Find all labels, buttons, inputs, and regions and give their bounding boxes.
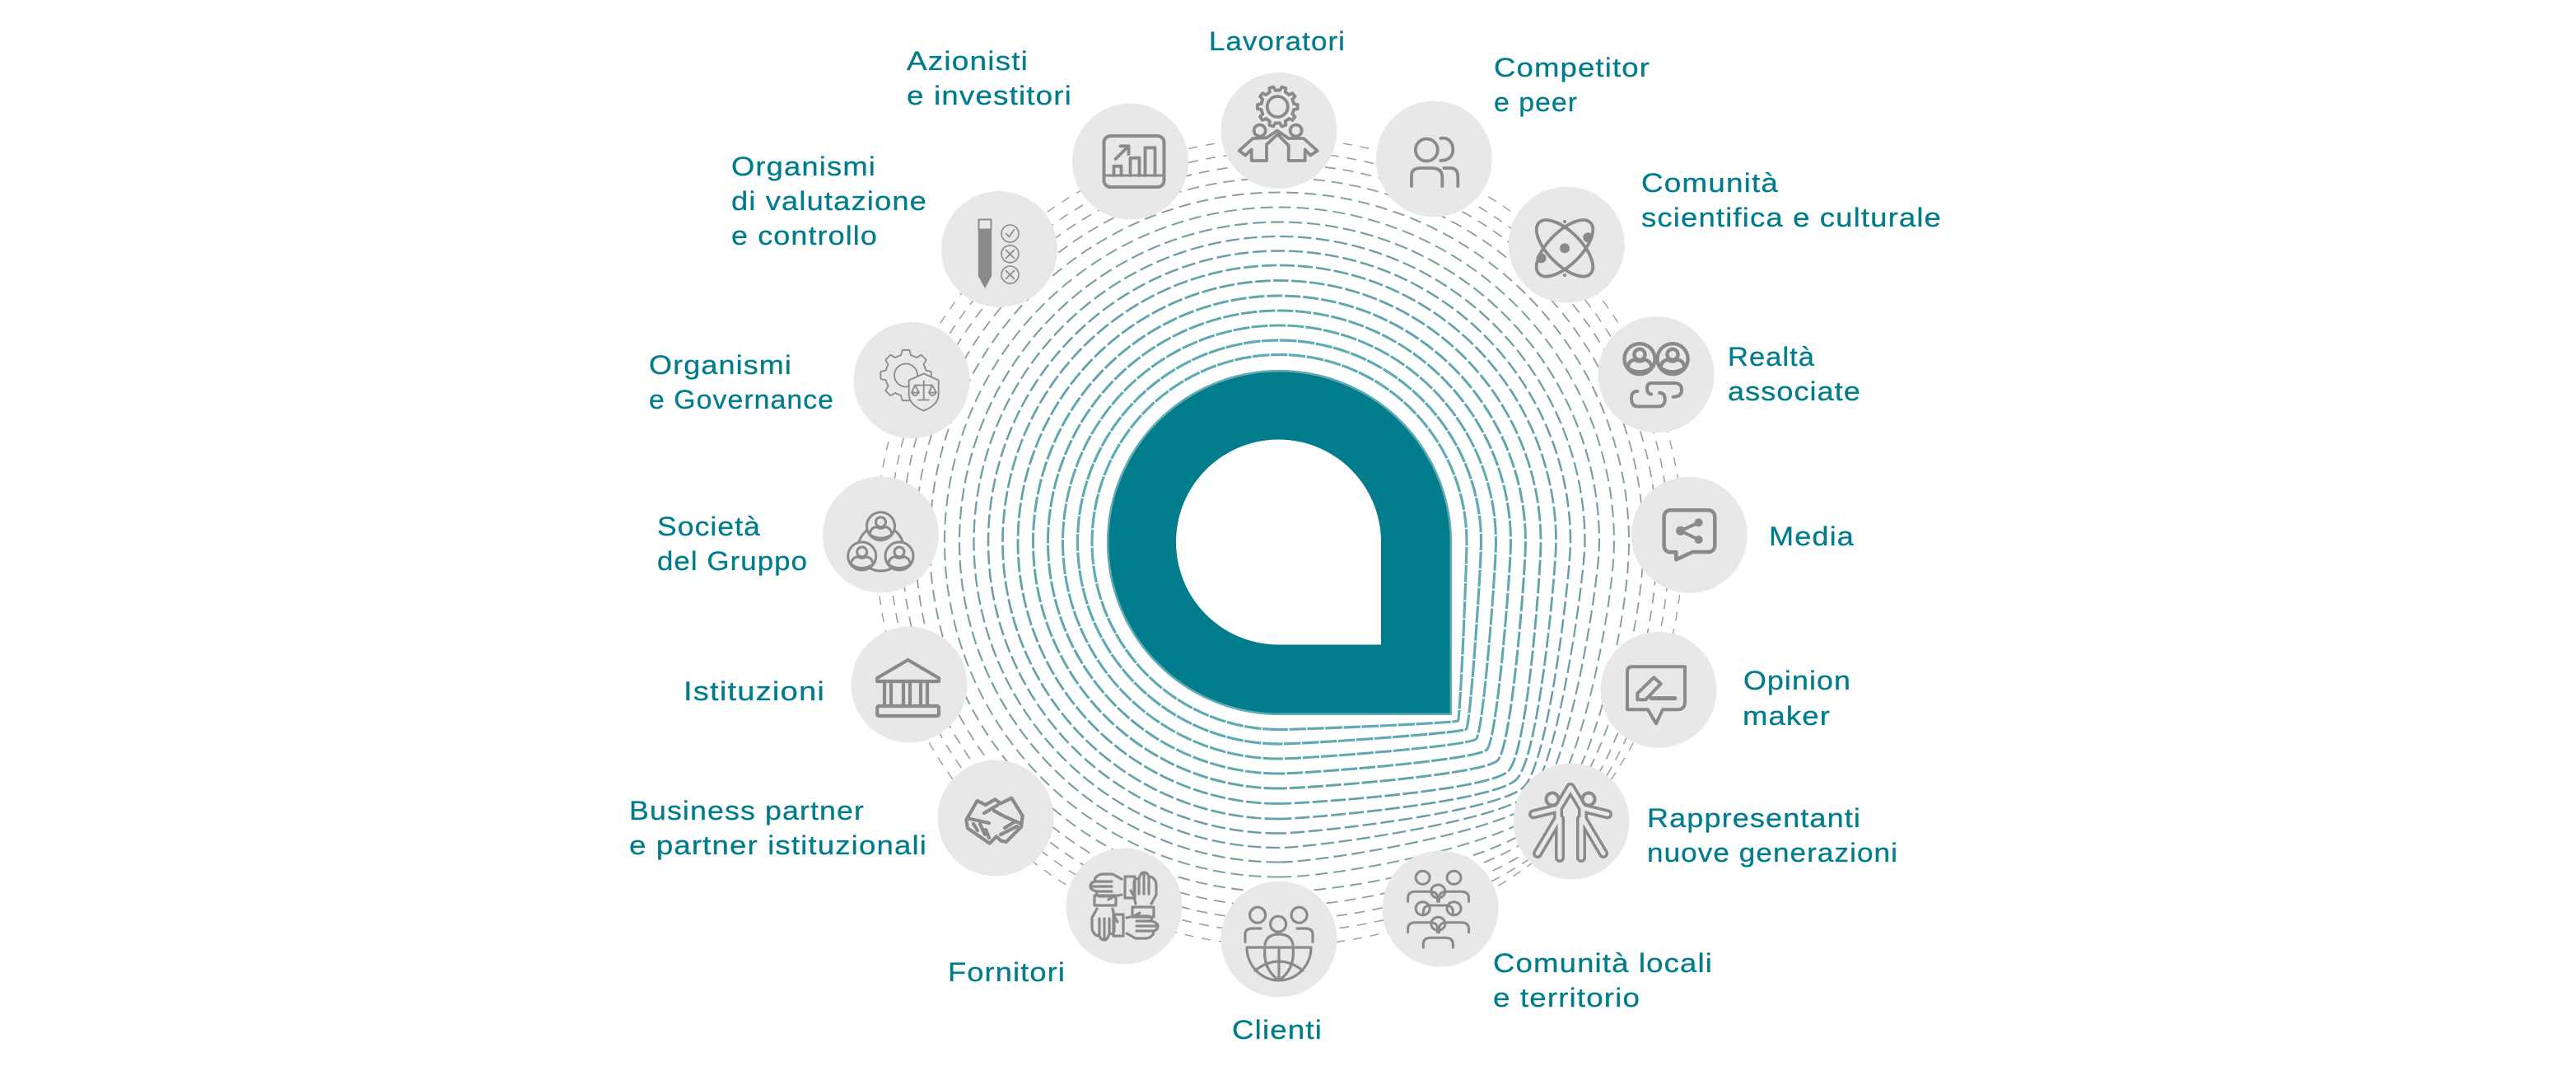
label: Rappresentanti nuove generazioni: Rappresentanti: [1647, 803, 1861, 833]
label: Organismi e Governance: Organismi: [649, 350, 792, 380]
label: Organismi di valutazione e controllo: [731, 152, 927, 250]
logo outline: [1108, 371, 1451, 714]
stakeholder: Comunità locali e territorio: [1382, 850, 1713, 1013]
stakeholder: Business partner e partner istituzionali: [629, 760, 1054, 877]
stakeholder: Lavoratori: [1209, 26, 1346, 189]
icon: gear above two people: [1220, 72, 1337, 189]
label: Comunità locali e territorio: e territorio: [1493, 983, 1640, 1013]
icon: people above a globe: [1220, 882, 1337, 997]
icon: two people: [1376, 101, 1492, 217]
stakeholder: Organismi di valutazione e controllo: [731, 152, 1057, 307]
icon: three connected avatars: [823, 476, 939, 593]
label: Realtà associate: associate: [1728, 376, 1861, 406]
central logo: teal drop with white counter: [1107, 370, 1452, 715]
label: Comunità locali e territorio: Comunità locali: [1493, 948, 1713, 978]
icon: handshake: [937, 760, 1054, 877]
label: Comunità scientifica e culturale: Comunità: [1641, 168, 1779, 198]
label: Azionisti e investitori: Azionisti: [907, 46, 1029, 76]
label: Competitor e peer: e peer: [1494, 87, 1578, 117]
stakeholder: Realtà associate: [1598, 316, 1861, 433]
icon: four interlocking hands: [1066, 849, 1183, 964]
icon: pencil with checklist: [941, 191, 1057, 307]
stakeholder: Fornitori: [948, 849, 1183, 987]
stakeholder: Istituzioni: [684, 626, 967, 743]
label: Azionisti e investitori: [907, 46, 1072, 110]
icon: gear with shield and scales: [853, 322, 970, 438]
stakeholder: Opinion maker: [1601, 632, 1851, 748]
stakeholder: Azionisti e investitori: [907, 46, 1188, 219]
label: Business partner e partner istituzionali: e partner istituzionali: [629, 830, 927, 860]
label: Organismi di valutazione e controllo: di valutazione: [731, 186, 927, 216]
icon: crowd of people: [1382, 850, 1499, 967]
stakeholder: Rappresentanti nuove generazioni: [1514, 763, 1898, 880]
label: Rappresentanti nuove generazioni: nuove generazioni: [1647, 838, 1898, 868]
icon: atom: [1509, 186, 1625, 303]
label: Opinion maker: Opinion: [1743, 666, 1851, 695]
label: Business partner e partner istituzionali: Business partner: [629, 796, 865, 825]
label: Azionisti e investitori: e investitori: [907, 81, 1072, 110]
icon: speech bubble with pencil: [1601, 632, 1716, 748]
label: Istituzioni: Istituzioni: [684, 676, 825, 706]
label: Organismi e Governance: e Governance: [649, 385, 834, 414]
label: Competitor e peer: Competitor: [1494, 53, 1650, 82]
stakeholder: Comunità scientifica e culturale: [1509, 168, 1942, 303]
label: Rappresentanti nuove generazioni: [1647, 803, 1898, 868]
label: Realtà associate: [1728, 342, 1861, 406]
label: Organismi e Governance: [649, 350, 834, 414]
icon: speech bubble with share symbol: [1631, 477, 1748, 593]
label: Opinion maker: maker: [1743, 701, 1831, 731]
icon: two avatars and chain link: [1598, 316, 1715, 433]
label: Comunità scientifica e culturale: [1641, 168, 1942, 232]
stakeholder: Organismi e Governance: [649, 322, 970, 438]
stakeholder: Media: [1631, 477, 1855, 593]
concentric dashed rings around the logo: [876, 138, 1683, 946]
label: Società del Gruppo: Società: [657, 512, 761, 541]
stakeholder: Società del Gruppo: [657, 476, 939, 593]
label: Organismi di valutazione e controllo: Organismi: [731, 152, 876, 181]
label: Business partner e partner istituzionali: [629, 796, 927, 860]
stakeholder: Competitor e peer: [1376, 53, 1650, 217]
label: Realtà associate: Realtà: [1728, 342, 1815, 372]
label: Lavoratori: Lavoratori: [1209, 26, 1346, 56]
label: Società del Gruppo: [657, 512, 808, 576]
icon: classical building: [852, 626, 967, 743]
label: Organismi di valutazione e controllo: e controllo: [731, 221, 878, 250]
label: Media: Media: [1769, 521, 1855, 551]
label: Opinion maker: [1743, 666, 1851, 731]
label: Competitor e peer: [1494, 53, 1650, 117]
label: Comunità scientifica e culturale: scientifica e culturale: [1641, 203, 1942, 232]
label: Società del Gruppo: del Gruppo: [657, 546, 808, 576]
label: Clienti: Clienti: [1232, 1015, 1323, 1045]
stakeholder: Clienti: [1220, 882, 1337, 1045]
label: Comunità locali e territorio: [1493, 948, 1713, 1013]
icon: growth chart on screen: [1072, 104, 1188, 219]
label: Fornitori: Fornitori: [948, 957, 1066, 987]
icon: two figures high-five: [1514, 763, 1629, 880]
